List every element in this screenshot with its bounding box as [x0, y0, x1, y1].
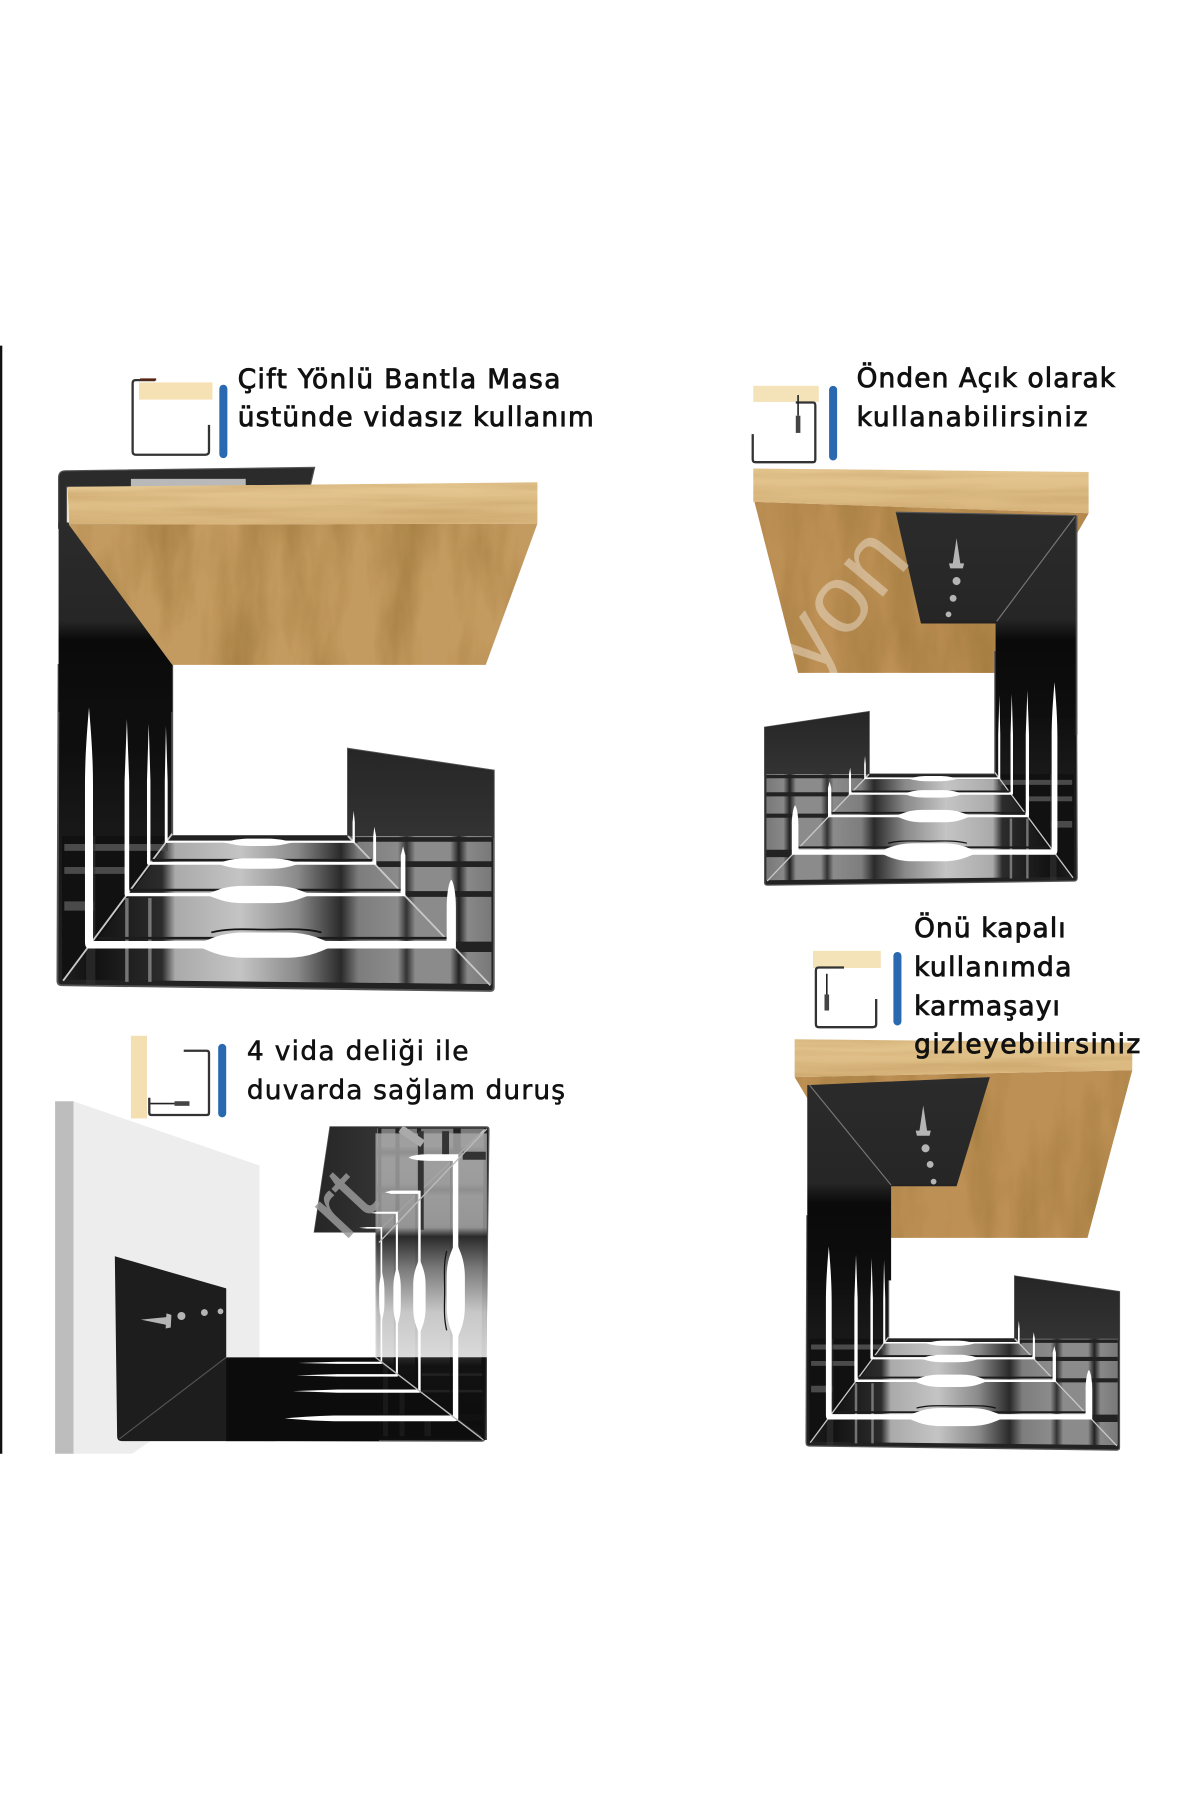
heading: closed front: Önü kapalı — [914, 912, 1066, 944]
heading: closed front: kullanımda — [914, 952, 1071, 983]
illustration: wall — [55, 1101, 260, 1454]
heading: open front — [857, 362, 1116, 433]
icon: blue divider — [893, 952, 901, 1025]
panel: closed front use — [795, 912, 1140, 1450]
icon: blue divider — [218, 1044, 226, 1117]
illustration: bracket fixed to wall — [115, 1127, 489, 1441]
illustration: bracket taped on top of desk — [57, 467, 537, 991]
heading: closed front: karmaşayı — [914, 991, 1060, 1022]
illustration: bracket under desk, closed front — [795, 1039, 1132, 1450]
watermark: rt: rt — [287, 1150, 395, 1255]
heading: closed front — [914, 912, 1140, 1060]
illustration: bracket under desk, mirrored — [747, 469, 1089, 885]
watermark: yon: yon — [747, 505, 929, 693]
heading: wall mount — [247, 1036, 565, 1106]
heading: open front: Önden Açık olarak — [857, 362, 1116, 394]
icon: wall mount profile — [131, 1036, 209, 1118]
heading: tape use — [238, 364, 594, 433]
heading: tape use: üstünde vidasız kullanım — [238, 402, 594, 433]
icon: closed front profile — [813, 951, 881, 1027]
heading: open front: kullanabilirsiniz — [857, 402, 1087, 433]
heading: closed front: gizleyebilirsiniz — [914, 1029, 1140, 1060]
icon: tape mount profile — [133, 380, 212, 455]
watermark: rt — [287, 1129, 423, 1255]
left edge line — [0, 346, 2, 1454]
heading: wall mount: 4 vida deliği ile — [247, 1036, 469, 1067]
heading: tape use: Çift Yönlü Bantla Masa — [238, 364, 560, 395]
panel: open front use — [747, 362, 1116, 885]
heading: wall mount: duvarda sağlam duruş — [247, 1075, 565, 1106]
icon: blue divider — [829, 386, 837, 460]
panel: wall mount — [55, 1036, 565, 1454]
icon: open front profile — [753, 386, 819, 462]
panel: double-sided tape use — [57, 364, 594, 991]
icon: blue divider — [219, 385, 227, 458]
